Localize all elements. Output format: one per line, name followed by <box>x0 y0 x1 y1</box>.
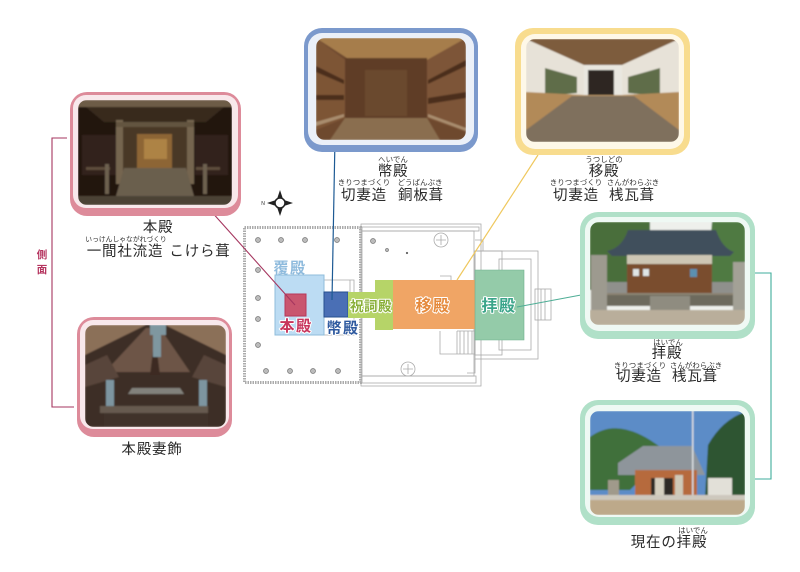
panel: 本殿妻飾 photo <box>77 317 232 437</box>
移殿 block <box>393 280 475 329</box>
caption: 移殿: 桟瓦葺 <box>609 187 655 204</box>
panel: 幣殿 photo <box>304 28 478 152</box>
caption: 幣殿: きりつまづくり <box>338 178 390 187</box>
caption: 移殿: さんがわらぶき <box>607 177 659 187</box>
caption: 拝殿: 桟瓦葺 <box>672 368 718 385</box>
caption: 移殿: きりつまづくり <box>550 178 602 187</box>
覆殿 block <box>273 260 324 335</box>
caption: 幣殿: どうばんぶき <box>398 178 442 187</box>
panel: 本殿 photo <box>70 92 241 216</box>
caption: 拝殿: 拝殿 <box>652 345 682 362</box>
移殿 block: 移殿 <box>415 297 451 315</box>
caption: 本殿: こけら葺 <box>169 243 231 260</box>
icon: compass: N <box>261 201 265 207</box>
panel: 現在の拝殿 photo <box>580 400 755 525</box>
本殿 block <box>279 294 313 335</box>
caption: 本殿: いっけんしゃながれづくり <box>85 234 167 244</box>
leader line: 拝殿 <box>517 295 581 307</box>
caption: 移殿: うつしどの <box>585 155 623 164</box>
caption: 現在の拝殿 <box>631 526 708 551</box>
幣殿 block: 幣殿 <box>326 320 360 337</box>
icon: compass <box>261 190 293 216</box>
caption: 拝殿: 切妻造 <box>616 368 662 385</box>
bracket: 側面 <box>37 138 74 407</box>
bracket: 側面: 側 <box>37 248 47 261</box>
leader line: 移殿 <box>457 155 538 280</box>
caption: 幣殿: 幣殿 <box>378 163 408 180</box>
caption: 幣殿: 銅板葺 <box>398 187 444 204</box>
panel: 移殿 photo <box>515 28 690 155</box>
caption: 拝殿: はいでん <box>653 338 683 347</box>
leader line: 本殿 <box>210 210 295 305</box>
拝殿 block <box>475 270 524 340</box>
leader line: 幣殿 <box>332 138 335 300</box>
caption: 現在の拝殿: 現在の拝殿 <box>631 534 707 551</box>
caption: 幣殿: へいでん <box>378 155 408 164</box>
bracket: 側面: 面 <box>37 264 47 276</box>
panel: 拝殿 photo <box>580 212 755 339</box>
floor plan <box>244 224 551 386</box>
caption: 拝殿 <box>614 338 722 385</box>
祝詞殿 block <box>348 280 393 330</box>
caption: 幣殿 <box>338 155 444 204</box>
caption: 拝殿: さんがわらぶき <box>670 360 722 370</box>
祝詞殿 block: 祝詞殿 <box>350 299 392 314</box>
caption: 本殿 <box>85 219 231 260</box>
caption: 移殿 <box>550 155 659 204</box>
caption: 幣殿: 切妻造 <box>341 187 387 204</box>
caption: 現在の拝殿: はいでん <box>678 526 708 535</box>
caption: 本殿妻飾: 本殿妻飾 <box>121 441 183 458</box>
幣殿 block <box>324 292 360 337</box>
拝殿 block: 拝殿 <box>481 297 517 315</box>
caption: 移殿: 切妻造 <box>553 187 599 204</box>
caption: 本殿: 一間社流造 <box>87 243 163 260</box>
caption: 移殿: 移殿 <box>589 163 619 180</box>
bracket: 拝殿 <box>755 273 771 479</box>
caption: 拝殿: きりつまづくり <box>614 361 666 370</box>
覆殿 block: 覆殿 <box>273 260 307 277</box>
caption: 本殿: 本殿 <box>143 219 173 236</box>
本殿 block: 本殿 <box>279 318 313 335</box>
